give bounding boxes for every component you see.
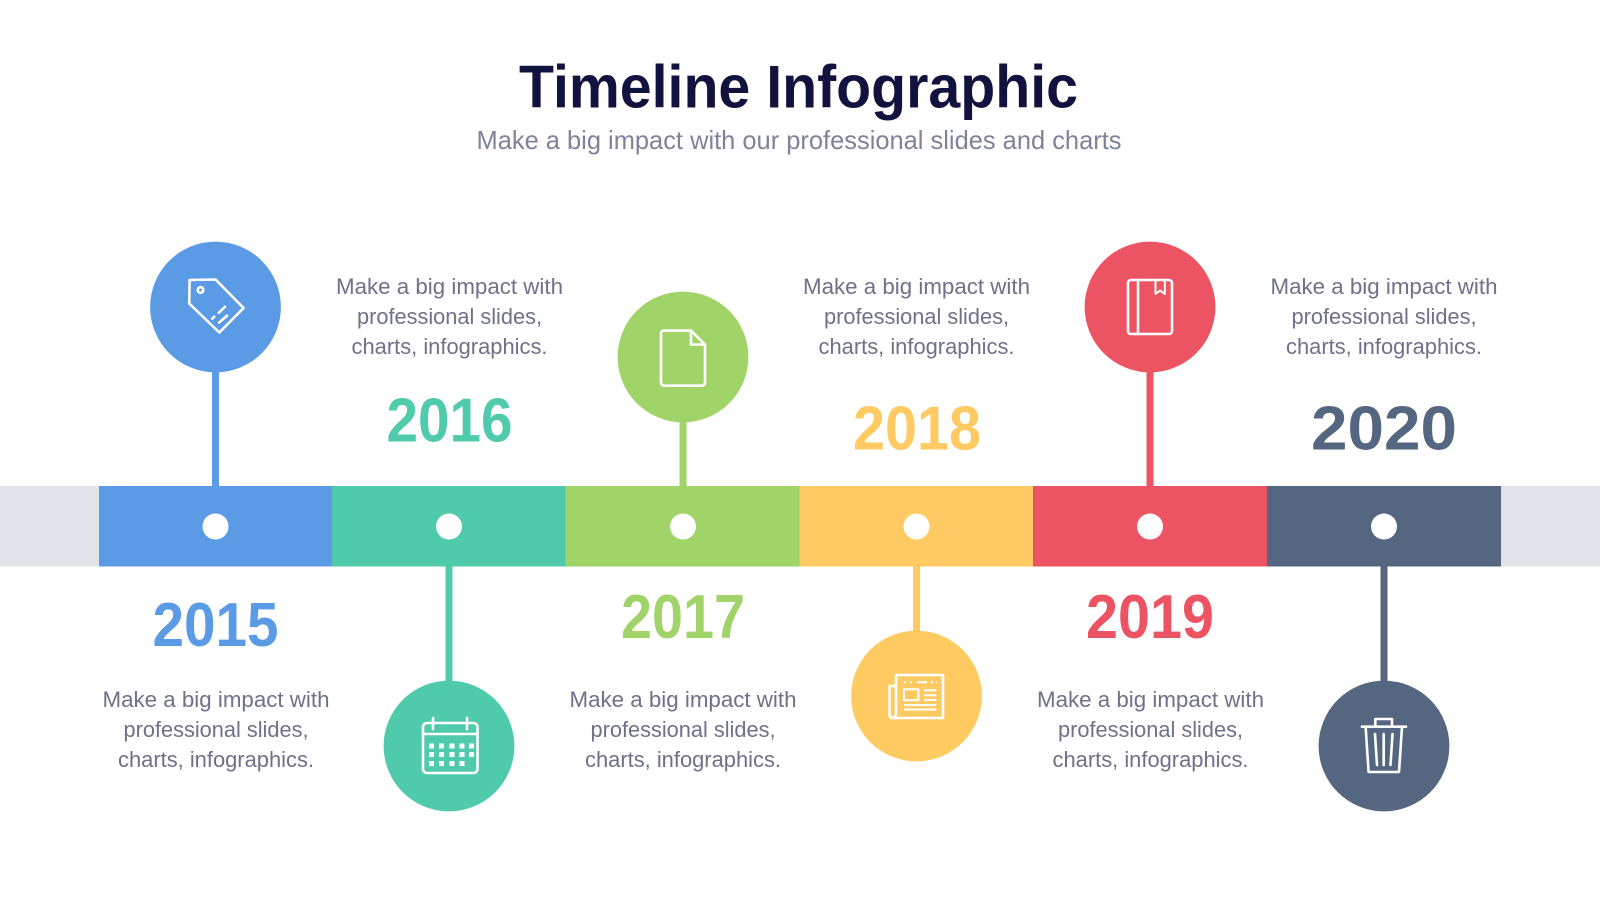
description 2019 [1037,687,1264,772]
year 2016: 2016 [386,386,512,456]
stem 2018 [913,566,920,641]
description 2016: professional slides, [357,304,542,329]
milestone 2020 [1270,274,1498,811]
description 2017: charts, infographics. [585,747,781,772]
year 2019: 2019 [1086,583,1214,652]
icon: newspaper [890,675,943,718]
milestone 2015 [102,242,330,772]
description 2015: Make a big impact with [102,687,330,712]
circle 2015 [150,242,281,372]
title: Timeline Infographic [519,54,1078,120]
icon: price tag [189,280,244,332]
description 2018: Make a big impact with [803,274,1030,299]
description 2015 [102,687,330,772]
icon: book [1128,280,1172,334]
stem 2017 [680,410,686,487]
year 2018: 2018 [853,394,981,464]
subtitle: Make a big impact with our professional slides and charts [476,125,1122,155]
description 2018 [803,274,1030,359]
description 2017: professional slides, [590,717,776,742]
milestone 2019 [1037,242,1264,772]
icon: trash can [1362,719,1406,772]
description 2015: professional slides, [124,717,308,742]
circle 2017 [618,292,748,422]
circle 2019 [1085,242,1215,372]
circle 2020 [1319,681,1449,811]
milestone 2017 [570,292,796,772]
description 2017 [570,687,796,772]
year 2020: 2020 [1311,394,1457,464]
stem 2015 [212,360,219,487]
description 2016 [336,274,563,359]
year 2017: 2017 [621,583,745,652]
stem 2020 [1380,566,1388,691]
description 2019: Make a big impact with [1037,687,1264,712]
description 2016: charts, infographics. [352,334,548,359]
description 2020: charts, infographics. [1286,334,1482,359]
description 2017: Make a big impact with [570,687,796,712]
stem 2019 [1146,360,1154,487]
timeline bar [0,486,1600,566]
description 2020: Make a big impact with [1270,274,1498,299]
description 2019: charts, infographics. [1052,747,1248,772]
milestone 2018 [803,274,1030,761]
description 2016: Make a big impact with [336,274,563,299]
year 2015: 2015 [152,591,278,660]
icon: calendar [423,718,478,773]
circle 2016 [384,681,514,811]
description 2015: charts, infographics. [118,747,314,772]
description 2020 [1270,274,1498,359]
description 2018: professional slides, [824,304,1009,329]
icon: document [661,331,705,386]
description 2019: professional slides, [1058,717,1243,742]
stem 2016 [446,566,452,691]
milestone 2016 [336,274,563,811]
circle 2018 [851,631,982,761]
description 2018: charts, infographics. [818,334,1014,359]
description 2020: professional slides, [1292,304,1476,329]
